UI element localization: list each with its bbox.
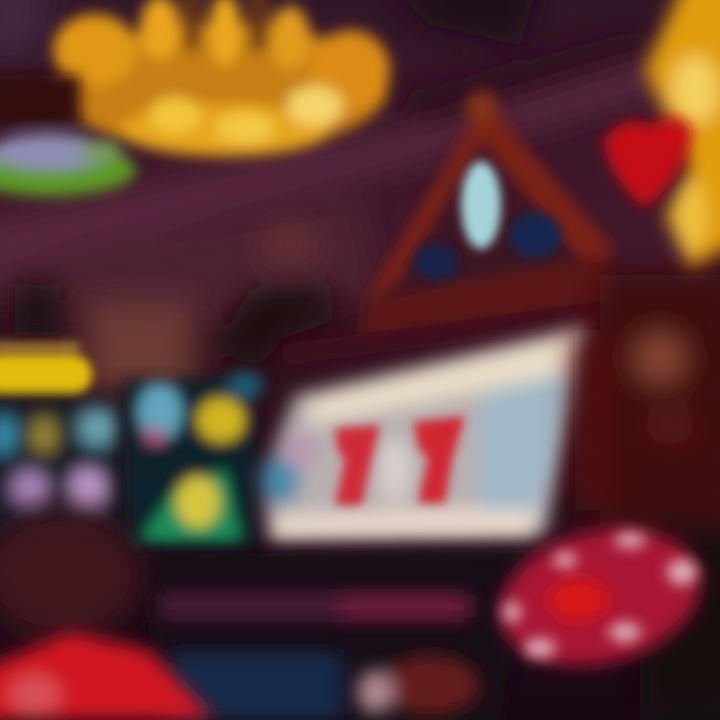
yellow flames <box>645 0 720 268</box>
red sevens <box>335 416 465 505</box>
slot machine top with mirror <box>280 90 615 365</box>
bottom centre chips <box>357 655 480 715</box>
red garment <box>0 632 215 720</box>
chandelier <box>53 0 390 156</box>
chip edge spots <box>503 532 697 658</box>
machine base and controls <box>140 550 530 720</box>
centre slot machine <box>125 371 263 550</box>
ceiling beams <box>0 0 720 320</box>
red heart <box>603 118 692 208</box>
back wall arches <box>15 227 335 390</box>
yellow bar sign <box>0 343 92 396</box>
mirror oval <box>461 161 501 249</box>
poker chips <box>485 508 715 686</box>
dark blue panels <box>414 213 561 280</box>
right dark cabinet with face <box>575 275 720 720</box>
left ring lamp <box>0 75 136 196</box>
foreground figure <box>0 511 215 720</box>
left slot machines <box>0 400 122 530</box>
main screen <box>260 325 590 542</box>
red arch <box>280 90 615 365</box>
